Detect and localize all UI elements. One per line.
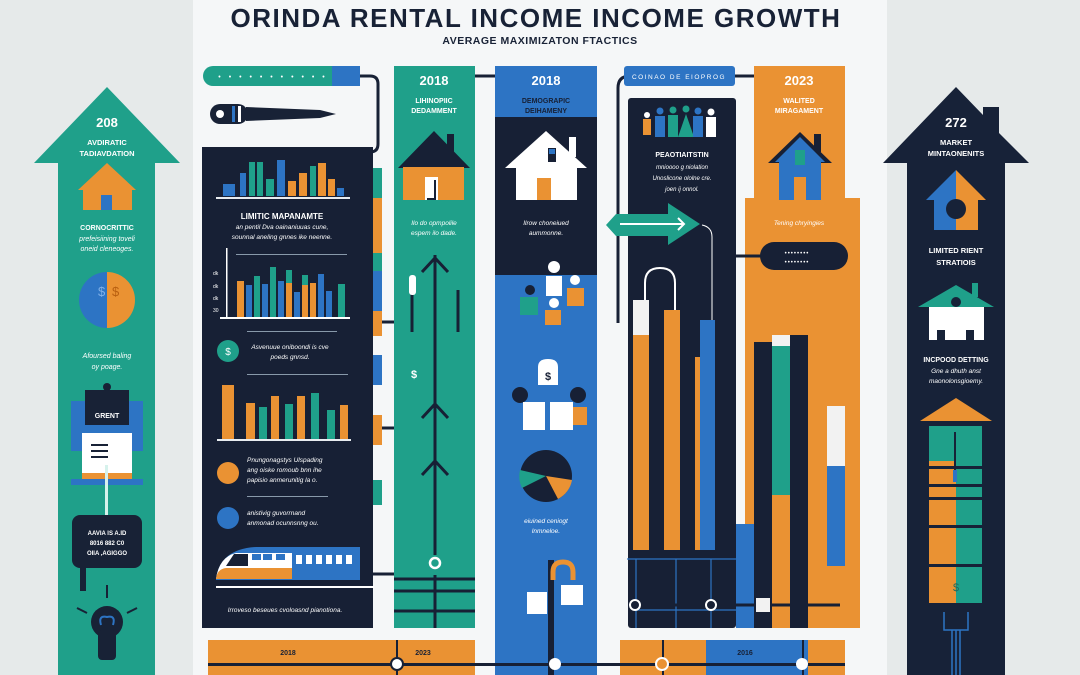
icon: money bag [512, 359, 587, 430]
panel: navy analytics panel: Irroveso beseues cvoloasnd pianotiona. [228, 607, 342, 614]
panel: teal column 2018: Ilo do opmpolile [411, 220, 457, 227]
icon: orange dot with text [217, 457, 323, 484]
panel: orange column 2023: WALITED [783, 98, 815, 105]
callout: navy pill: •••••••• [785, 260, 809, 266]
panel: teal column 2018: DEDAMMENT [411, 108, 457, 115]
icon: blue dot with text: anmonad ocunnsnng ou. [247, 520, 319, 527]
icon: split house [926, 170, 986, 230]
callout: navy box [72, 515, 142, 591]
connector: blue pill [618, 66, 755, 323]
title: ORINDA RENTAL INCOME INCOME GROWTH [231, 3, 841, 33]
panel: navy analytics panel: poeds gnnsd. [269, 354, 310, 361]
panel: left teal arrow: prefeisiining toveli [78, 236, 135, 243]
icon: GRENT clipboard [71, 383, 143, 515]
icon: people [520, 261, 584, 325]
connector: blue pill: COINAO DE EIOPROG [632, 74, 726, 81]
icon: tower: $ [953, 582, 959, 594]
panel: right navy arrow: MARKET [940, 138, 972, 147]
panel: orange column 2023: Tening chryingies [774, 220, 825, 227]
bar chart middle [217, 385, 351, 441]
panel: left teal arrow: CORNOCRITTIC [80, 225, 134, 232]
timeline: bottom bar: 2023 [415, 650, 431, 657]
panel: central white sheet [193, 0, 887, 675]
panel: blue column 2018: DEMOGRAPIC [522, 98, 570, 105]
panel: right navy arrow: INCPOOD DETTING [923, 357, 989, 364]
panel: navy center panel: Unoslicone ololne cre. [652, 176, 712, 182]
icon: orange dot with text: Pnungonagstys Ulspading [247, 457, 323, 464]
panel: navy analytics panel: sounnal aneling gnnes ike neenne. [232, 234, 332, 241]
panel: left teal arrow: AVDIRATIC [87, 138, 127, 147]
panel: right navy arrow [883, 87, 1029, 675]
subtitle: AVERAGE MAXIMIZATON FTACTICS [442, 35, 638, 47]
icon: tower [920, 398, 992, 603]
bar chart with axis: dk [213, 271, 219, 277]
bar chart with axis: dk [213, 296, 219, 302]
icon: orange house [78, 163, 136, 210]
icon: white house [505, 131, 587, 200]
panel: left teal arrow: oneid cleneoges. [81, 246, 134, 253]
arrow: teal [606, 203, 700, 245]
connector: teal bar with line: • • • • • • • • • • • [218, 74, 328, 81]
bar chart with axis [213, 248, 350, 319]
panel: navy analytics panel [202, 147, 382, 628]
icon: dollar circle [217, 340, 239, 362]
icon: orange dot with text: papisio anmerunitig la o. [246, 477, 318, 484]
panel: right navy arrow: STRATIOIS [936, 258, 976, 267]
connector: teal bar with line [203, 66, 378, 152]
icon: light bulb [77, 585, 137, 660]
icon: key [210, 104, 336, 124]
icon: crowd [643, 106, 716, 137]
panel: right navy arrow: maonolonsgioemy. [929, 378, 983, 385]
timeline: bottom bar: 2016 [737, 650, 753, 657]
panel: blue column 2018: 2018 [532, 73, 560, 88]
panel: left teal arrow: TADIAVDATION [80, 149, 134, 158]
timeline: bottom bar: 2018 [280, 650, 296, 657]
panel: right navy arrow: 272 [945, 115, 967, 130]
panel: teal column 2018: espem ilo dade. [411, 230, 457, 237]
panel: right navy arrow: LIMITED RIENT [929, 246, 984, 255]
timeline: bottom bar [208, 640, 845, 675]
panel: left teal arrow: 208 [96, 115, 118, 130]
panel: navy analytics panel: an pentil Dva oainaniuuas cune, [236, 224, 328, 231]
panel: orange column 2023 [736, 66, 860, 628]
panel: left teal arrow: Afoursed baling [82, 353, 131, 360]
icon: coin circle: $ [112, 284, 120, 299]
icon: arrows and lines [394, 255, 475, 628]
panel: blue column 2018: aummonne. [529, 230, 563, 237]
icon: blue dot with text: anistivig guvorrnand [247, 510, 306, 517]
icon: coin circle: $ [98, 284, 106, 299]
callout: navy box: OIIA ,AGIGGO [87, 551, 127, 557]
bar chart with axis: dk [213, 284, 219, 290]
panel: blue column 2018: DEIHAMENY [525, 108, 567, 115]
icon: money bag: $ [545, 371, 551, 383]
panel: right navy arrow: Gne a dhuth anst [931, 368, 982, 375]
callout: navy box: 8016 882 C0 [90, 541, 125, 547]
bar chart top [216, 160, 350, 199]
icon: blue house [768, 132, 832, 200]
panel: navy center panel: PEAOTIAITSTIN [655, 152, 709, 159]
title [231, 3, 841, 47]
panel: left teal arrow [34, 87, 180, 675]
callout: navy box: AAVIA IS A.ID [88, 531, 127, 537]
panel: teal column 2018: 2018 [420, 73, 448, 88]
panel: orange column 2023: MIRAGAMENT [775, 108, 824, 115]
panel: right navy arrow: MINTAONENITS [928, 149, 984, 158]
panel: navy center panel [606, 98, 736, 628]
panel: blue column 2018: Ilrow choneiued [523, 220, 569, 227]
panel: teal column 2018: LIHINOPIIC [415, 98, 453, 105]
panel: navy analytics panel: LIMITIC MAPANAMTE [241, 212, 324, 221]
panel: teal column 2018 [394, 66, 475, 628]
bar chart: tall bars [627, 300, 845, 628]
bar chart with axis: 30 [213, 308, 219, 314]
icon: pie chart [519, 450, 572, 502]
icon: locks [527, 560, 583, 675]
icon: orange dot with text: ang oiske romoub bnn ihe [247, 467, 322, 474]
panel: orange column 2023: 2023 [785, 73, 813, 88]
panel: teal column 2018: $ [411, 369, 417, 381]
panel: navy center panel: joen ij onnol. [664, 187, 699, 193]
icon: fork connector [944, 612, 968, 675]
panel: left teal arrow: oy poage. [92, 364, 122, 371]
icon: coin circle [79, 272, 135, 328]
panel: blue column 2018: lnmneloe. [532, 528, 560, 535]
icon: house [398, 131, 470, 200]
icon: blue dot with text [217, 507, 319, 529]
callout: navy pill: •••••••• [785, 251, 809, 257]
panel: navy analytics panel: Asvenuue oniboondi is cve [250, 344, 329, 351]
panel: blue column 2018 [495, 66, 597, 675]
callout: navy pill [736, 242, 848, 270]
panel: blue column 2018: eiuined ceniogt [524, 518, 569, 525]
icon: train [216, 547, 374, 588]
icon: GRENT clipboard: GRENT [95, 413, 120, 420]
icon: dollar circle: $ [225, 347, 231, 358]
icon: white hook line [645, 268, 675, 335]
panel: navy center panel: mnioooo g niolation [656, 165, 709, 171]
icon: teal roof house [918, 283, 994, 340]
